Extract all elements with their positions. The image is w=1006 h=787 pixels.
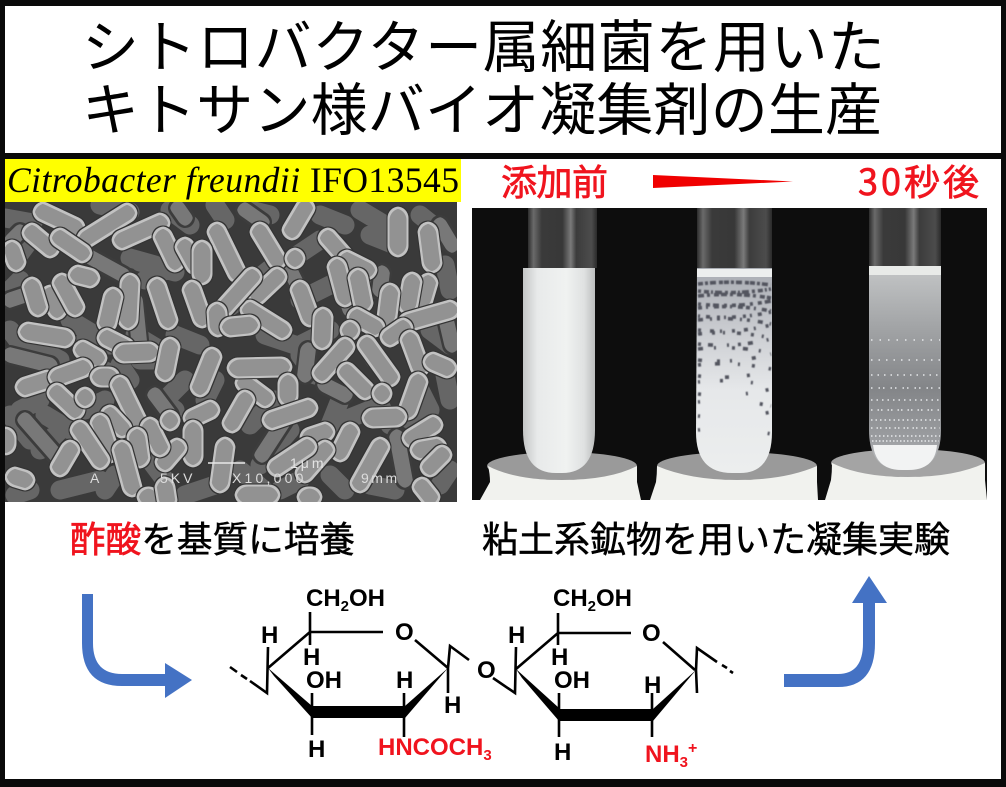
atom labels: [261, 585, 697, 771]
atom labels: O: [477, 657, 496, 684]
chemical structure: chitosan-like disaccharide: [230, 585, 733, 771]
atom labels: H: [554, 739, 571, 766]
atom labels: H: [444, 692, 461, 719]
panel: bacteria micrograph: [5, 202, 457, 502]
label: after 30 seconds: 30秒後: [858, 154, 979, 206]
panel: test tube photos: [472, 208, 987, 500]
caption: cultivation on acetic acid: 酢酸を基質に培養: [70, 512, 355, 563]
atom labels: H: [644, 672, 661, 699]
arrow: down then right: [82, 594, 192, 698]
atom labels: H: [308, 736, 325, 763]
atom labels: 2: [341, 598, 349, 615]
atom labels: H: [508, 622, 525, 649]
atom labels: 3: [680, 754, 688, 771]
atom labels: OH: [554, 667, 590, 694]
atom labels: O: [395, 619, 414, 646]
atom labels: CH: [306, 585, 341, 612]
atom labels: CH: [553, 585, 588, 612]
panel: bacteria micrograph: 5KV: [160, 470, 195, 486]
tube 1: milky suspension: [480, 208, 641, 500]
atom labels: 2: [588, 598, 596, 615]
species label on yellow band: Citrobacter freundii IFO13545: [7, 160, 459, 200]
title: キトサン様バイオ凝集剤の生産: [82, 65, 882, 147]
panel: bacteria micrograph: X10,000: [232, 470, 307, 486]
tube 2: flocculating suspension: [650, 208, 818, 500]
label: before addition: 添加前: [501, 154, 608, 206]
atom labels: H: [261, 622, 278, 649]
atom labels: +: [688, 740, 697, 757]
red wedge arrow: [653, 175, 793, 188]
atom labels: NH: [645, 741, 680, 768]
panel: bacteria micrograph: 1μm: [290, 455, 327, 471]
atom labels: H: [303, 644, 320, 671]
title: シトロバクター属細菌を用いた: [82, 2, 885, 84]
atom labels: OH: [596, 585, 632, 612]
caption: flocculation test with clay mineral: 粘土系鉱物を用いた凝集実験: [482, 511, 950, 563]
panel: bacteria micrograph: A: [90, 470, 100, 486]
atom labels: 3: [483, 747, 492, 764]
atom labels: HNCOCH: [378, 734, 483, 761]
arrow: right then up: [784, 576, 887, 687]
panel: bacteria micrograph: 9mm: [361, 470, 400, 486]
title: [82, 2, 885, 147]
bonds and wedges: [230, 612, 733, 737]
atom labels: OH: [349, 585, 385, 612]
tube 3: clarified water with settled floc: [825, 208, 987, 500]
atom labels: O: [642, 620, 661, 647]
atom labels: H: [396, 667, 413, 694]
atom labels: H: [551, 644, 568, 671]
atom labels: OH: [306, 667, 342, 694]
